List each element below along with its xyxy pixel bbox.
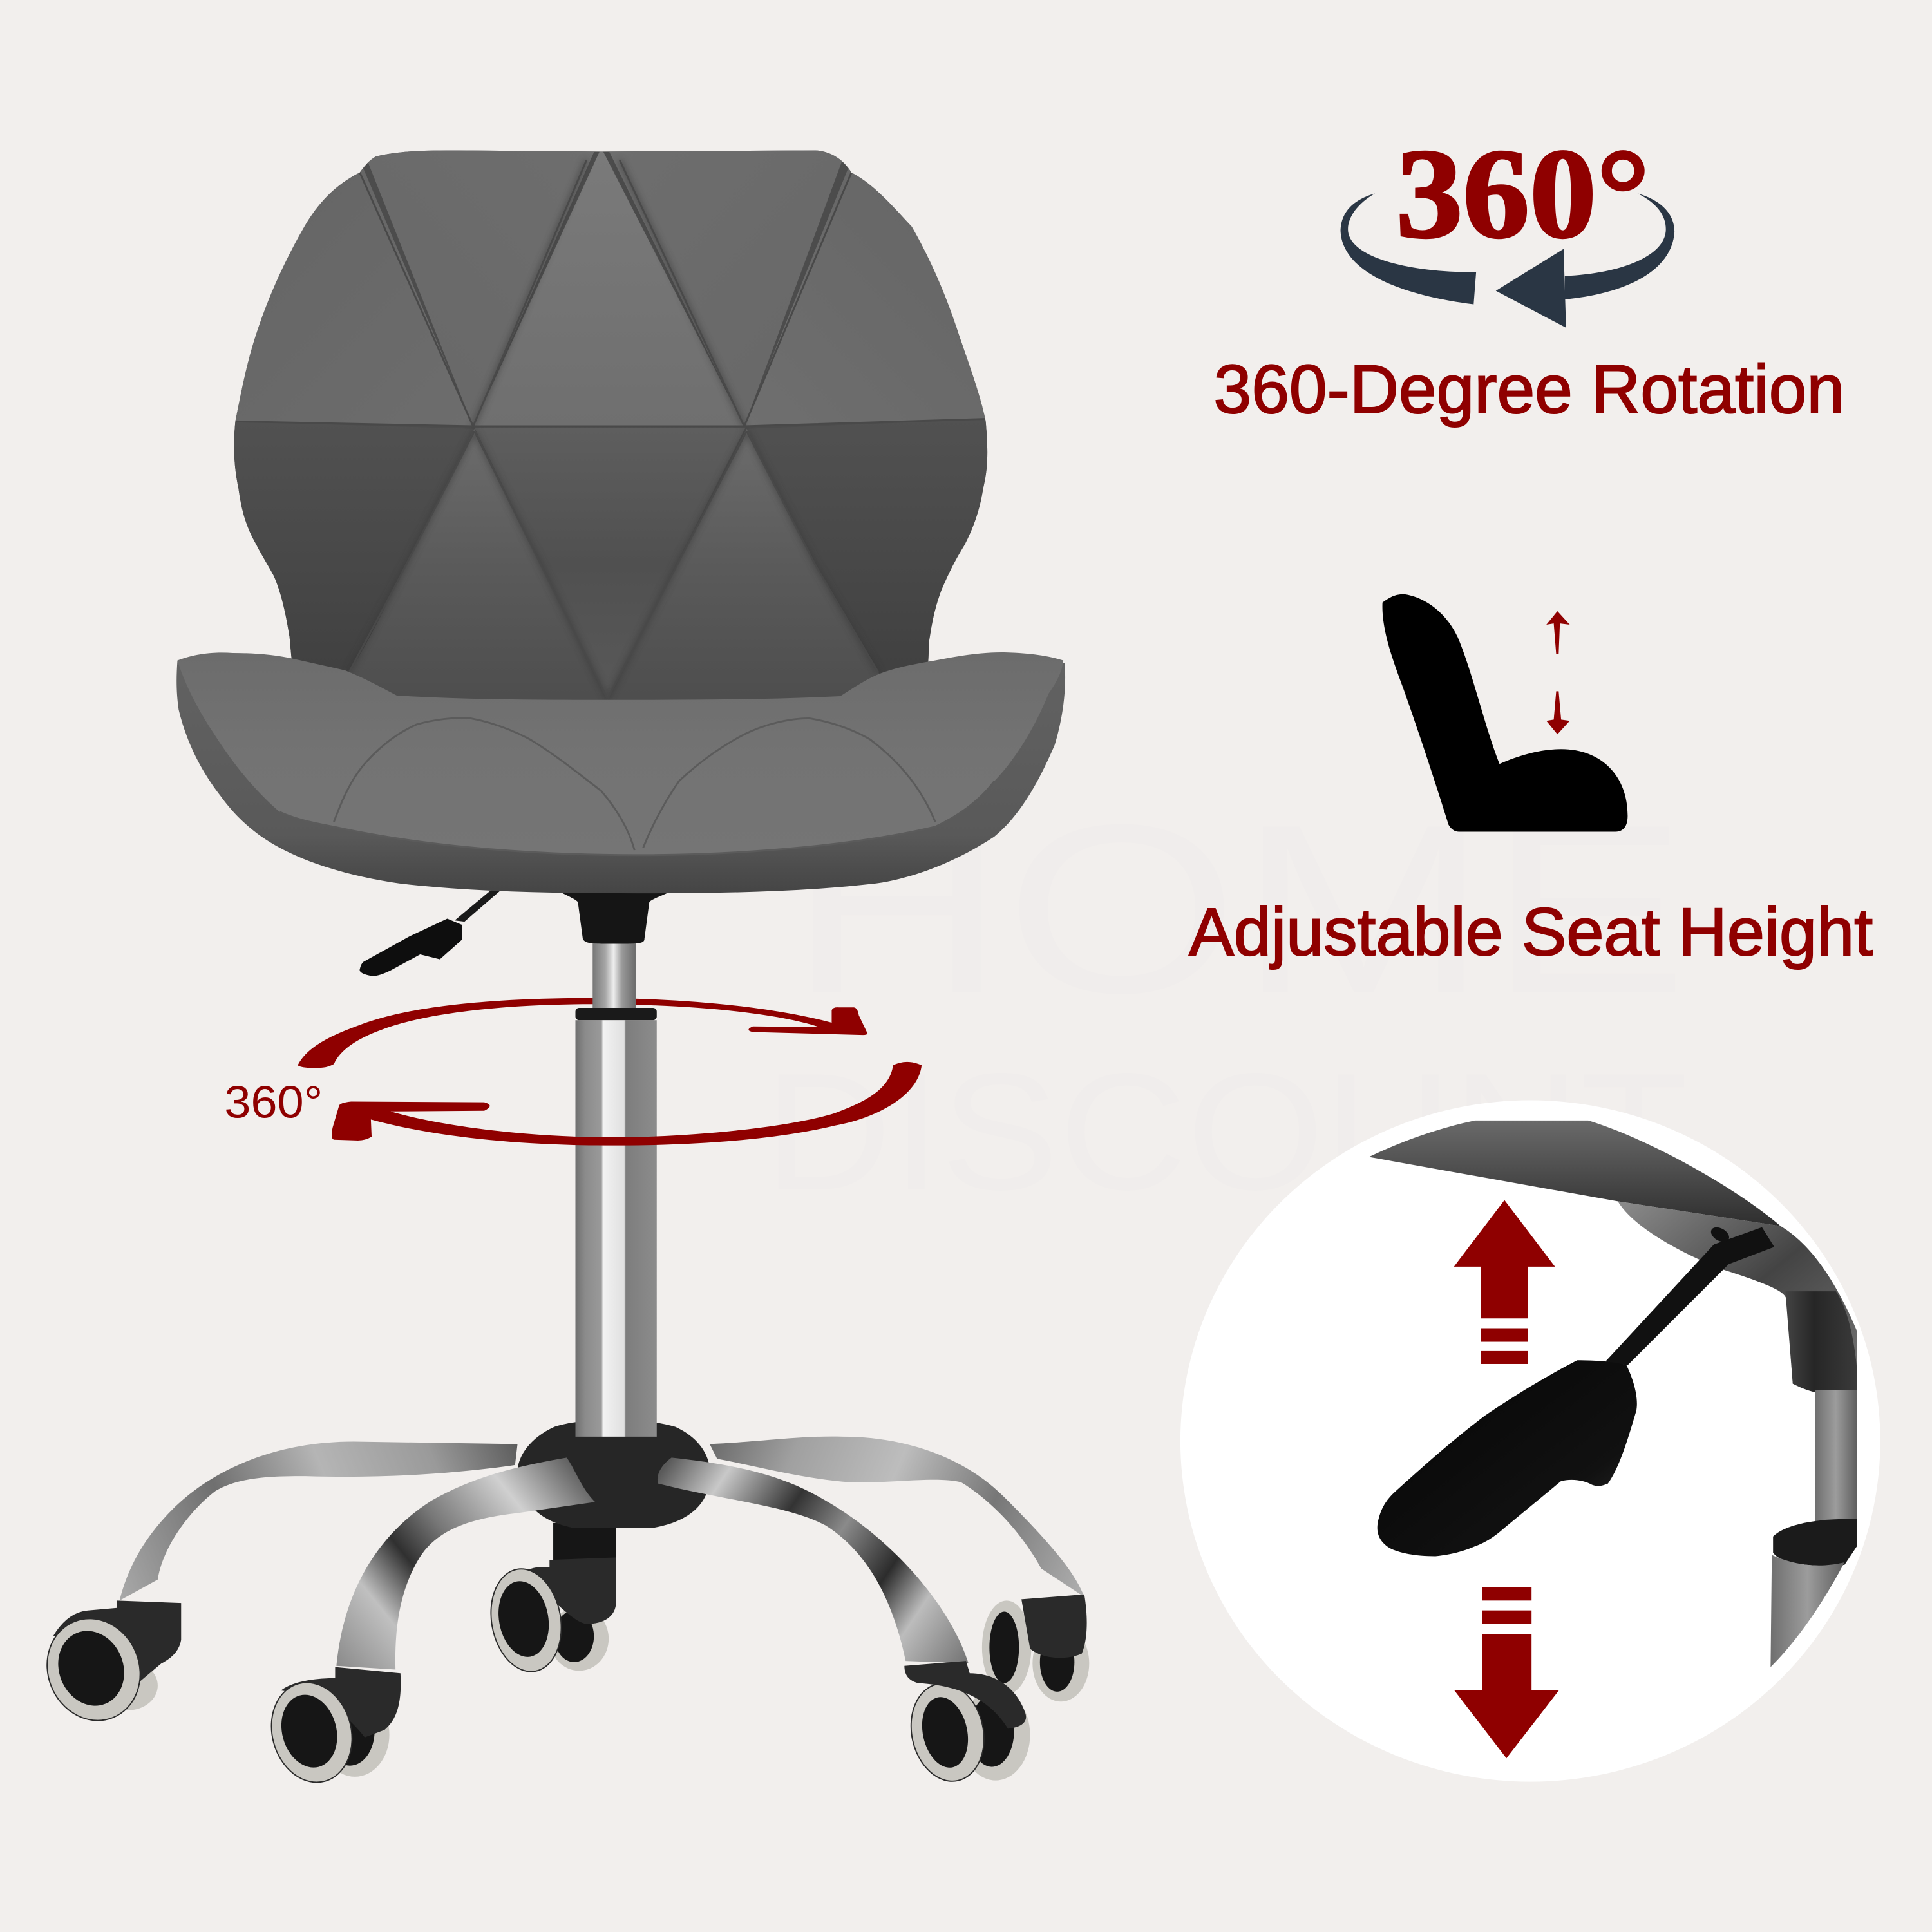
up arrow (1454, 1200, 1555, 1364)
heading: 360-Degree Rotation: 360-Degree Rotation (1214, 350, 1844, 428)
back panel: top right (609, 151, 842, 424)
large 360 degree numeral: 360° (1396, 123, 1650, 265)
seat mount collar (556, 889, 674, 944)
watermark: DISCOUNT (764, 1038, 1688, 1224)
mount bracket (1618, 1201, 1857, 1397)
rear caster stem (553, 1523, 616, 1562)
icon: down arrow (1546, 691, 1570, 734)
back panel: far right (744, 160, 998, 426)
rotation arrow: upper arc (298, 998, 867, 1068)
lever handle (1378, 1360, 1637, 1556)
down arrow (1454, 1587, 1559, 1758)
label: 360 degree beside arrow: 360° (224, 1077, 323, 1128)
caster: back left (32, 1600, 181, 1734)
back stitching (235, 160, 986, 699)
back panel: lower far left (234, 422, 379, 671)
chair illustration (32, 135, 1089, 1792)
icon: up arrow (1546, 611, 1570, 654)
icon: circular arrow (1341, 193, 1674, 328)
seat seams (279, 718, 994, 855)
detail callout: lever close-up (1180, 1101, 1880, 1782)
seat top surface (178, 652, 1063, 855)
back panel: lower far right (857, 420, 988, 674)
lower column (1770, 1555, 1844, 1667)
gas lift column (575, 942, 657, 1437)
base arm: front left (336, 1457, 595, 1669)
back panel: lower left (377, 429, 568, 632)
watermark (764, 775, 1688, 1224)
lever stalk (1605, 1227, 1774, 1365)
feature: adjustable seat height (1189, 594, 1873, 970)
caster: back right (982, 1595, 1089, 1701)
base arm: front right (658, 1457, 969, 1663)
heading: Adjustable Seat Height: Adjustable Seat Height (1189, 895, 1873, 970)
column ring (1773, 1519, 1857, 1566)
base arm: back right (710, 1437, 1084, 1597)
caster: front left (261, 1667, 401, 1792)
icon: seat silhouette (1383, 594, 1627, 831)
base hub (517, 1419, 710, 1528)
back panel: lower centre (475, 428, 746, 700)
back panel: far left (222, 160, 473, 426)
upper tube (1815, 1390, 1857, 1531)
white circle (1180, 1101, 1880, 1782)
caster: front right (902, 1661, 1030, 1788)
collar (1785, 1291, 1857, 1397)
chair back (222, 135, 998, 708)
lever pivot slot (1709, 1224, 1732, 1245)
feature: 360 degree rotation (1214, 123, 1844, 428)
back panel: lower right (648, 429, 848, 632)
watermark: HOME (788, 775, 1688, 1043)
seat (178, 652, 1063, 855)
seat underside rim (176, 661, 1065, 893)
caster: rear centre (483, 1557, 616, 1677)
seat underside (1369, 1121, 1781, 1226)
back panel: top centre (473, 148, 744, 426)
zoomed chair parts (1369, 1121, 1857, 1667)
rotation arrow: lower arc (332, 1062, 922, 1146)
height adjustment lever (359, 889, 502, 976)
back panel: top left (368, 151, 594, 424)
crease shadows (348, 160, 878, 699)
base arm: back left (120, 1442, 518, 1600)
